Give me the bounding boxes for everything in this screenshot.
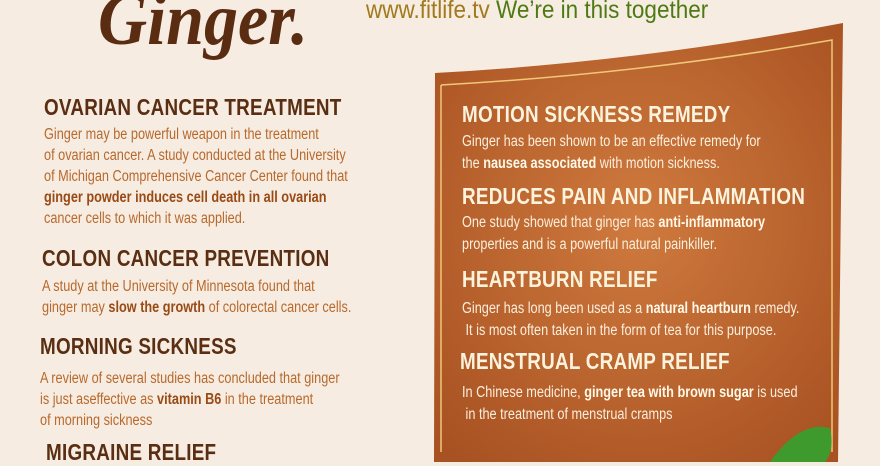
text: One study showed that ginger has anti-inflammatory bbox=[462, 214, 765, 231]
text: A review of several studies has concluded that ginger bbox=[40, 370, 340, 387]
left section: migraine: MIGRAINE RELIEF bbox=[46, 439, 216, 465]
text: the nausea associated with motion sickness. bbox=[462, 155, 720, 172]
text: of Michigan Comprehensive Cancer Center found that bbox=[44, 168, 348, 185]
left section: ovarian cancer: OVARIAN CANCER TREATMENT bbox=[44, 94, 342, 120]
text: in the treatment of menstrual cramps bbox=[466, 406, 673, 423]
text: ginger powder induces cell death in all ovarian bbox=[44, 189, 327, 206]
left section: morning sickness: MORNING SICKNESS bbox=[40, 333, 237, 359]
right section: motion sickness: MOTION SICKNESS REMEDY bbox=[462, 101, 730, 127]
icon: mint leaf bbox=[770, 427, 832, 462]
text: Ginger may be powerful weapon in the treatment bbox=[44, 126, 319, 143]
text: Ginger has been shown to be an effective remedy for bbox=[462, 133, 761, 150]
text: properties and is a powerful natural painkiller. bbox=[462, 236, 717, 253]
text: is just aseffective as vitamin B6 in the treatment bbox=[40, 391, 313, 408]
text: It is most often taken in the form of tea for this purpose. bbox=[466, 322, 776, 339]
text: of morning sickness bbox=[40, 412, 152, 429]
text: A study at the University of Minnesota found that bbox=[42, 278, 315, 295]
text: of ovarian cancer. A study conducted at the University bbox=[44, 147, 346, 164]
right section: menstrual: MENSTRUAL CRAMP RELIEF bbox=[460, 348, 730, 374]
text: In Chinese medicine, ginger tea with brown sugar is used bbox=[462, 384, 798, 401]
text: ginger may slow the growth of colorectal cancer cells. bbox=[42, 299, 351, 316]
text: cancer cells to which it was applied. bbox=[44, 210, 245, 227]
right section: heartburn: HEARTBURN RELIEF bbox=[462, 266, 658, 292]
left section: colon cancer: COLON CANCER PREVENTION bbox=[42, 245, 330, 271]
right section: pain: REDUCES PAIN AND INFLAMMATION bbox=[462, 183, 805, 209]
text: Ginger has long been used as a natural heartburn remedy. bbox=[462, 300, 799, 317]
